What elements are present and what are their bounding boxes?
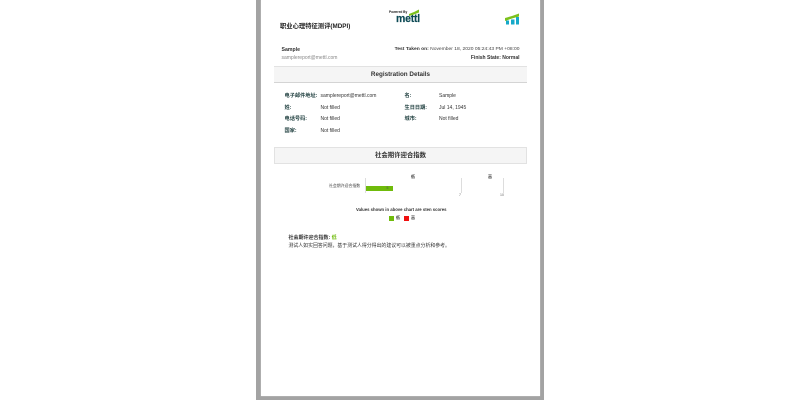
- heading: registration details: [274, 66, 527, 83]
- field: city label: 城市:: [404, 116, 417, 122]
- test date: Test Taken on: November 18, 2020 05:24:43 PM +08:00: [395, 47, 520, 52]
- legend swatch: low: [389, 216, 394, 220]
- axis line: [365, 178, 366, 193]
- logo: mettl bars icon: [505, 14, 519, 24]
- legend swatch: high: [404, 216, 409, 220]
- field: first name value: Sample: [439, 93, 456, 99]
- page sheet: [261, 0, 540, 396]
- legend: [389, 215, 415, 221]
- axis tick 10: 10: [500, 192, 504, 196]
- heading: registration details: Registration Details: [371, 71, 430, 78]
- finish state: Finish State: Normal: [471, 55, 520, 61]
- field: birth date label: 生日日期:: [404, 105, 427, 111]
- band label: low: 低: [411, 174, 415, 178]
- row label: 社会期许迎合指数: [329, 182, 360, 188]
- field: first name label: 名:: [404, 93, 411, 99]
- threshold line 7: [461, 178, 462, 193]
- field: last name value: Not filled: [320, 105, 340, 111]
- candidate name: Sample: [282, 47, 300, 53]
- result heading: 社会期许迎合指数: 低: [288, 235, 337, 241]
- candidate email: samplereport@mettl.com: [282, 55, 337, 61]
- heading: social desirability index: [274, 147, 527, 164]
- mettl wordmark: mettl: [396, 12, 420, 24]
- chart note: Values shown in above chart are sten scores: [356, 206, 446, 212]
- field: phone value: Not filled: [320, 116, 340, 122]
- score bar: [366, 186, 393, 190]
- logo swoosh: [409, 10, 419, 16]
- field: phone label: 电话号码:: [284, 116, 307, 122]
- field: country value: Not filled: [320, 128, 340, 134]
- registration fields: [284, 92, 466, 134]
- result description: 测试人如实回答问题，基于测试人得分得出的建议可以被重点分析和参考。: [288, 244, 450, 248]
- logo: powered by mettl: [389, 10, 420, 24]
- axis tick 7: 7: [459, 192, 461, 196]
- heading: social desirability index: 社会期许迎合指数: [375, 152, 426, 159]
- bar chart: [329, 174, 504, 196]
- band label: high: 高: [488, 174, 492, 178]
- field: city value: Not filled: [439, 116, 458, 122]
- powered by caption: Powered By: [389, 10, 407, 14]
- field: birth date value: Jul 14, 1945: [439, 105, 466, 111]
- field: email label: 电子邮件地址:: [284, 93, 317, 99]
- field: last name label: 姓:: [284, 105, 291, 111]
- field: email value: samplereport@mettl.com: [320, 93, 376, 99]
- field: country label: 国家:: [284, 128, 297, 134]
- legend label: low: 低: [396, 215, 400, 220]
- threshold line 10: [502, 178, 504, 193]
- score value: 5: [386, 186, 388, 190]
- page frame: [256, 0, 544, 400]
- legend label: high: 高: [411, 215, 415, 220]
- title: 职业心理特征测评(MDPI): [280, 23, 350, 30]
